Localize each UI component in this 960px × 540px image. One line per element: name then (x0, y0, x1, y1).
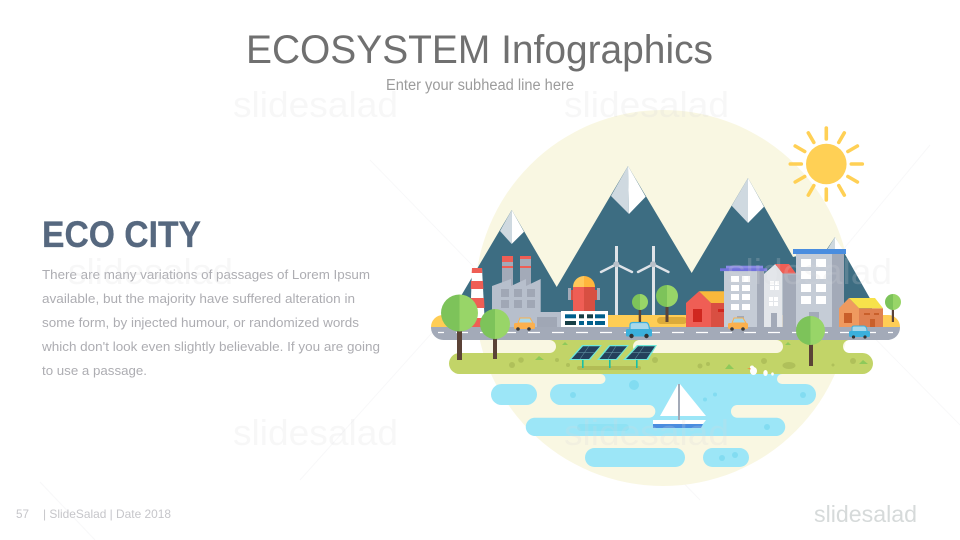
wind turbines (601, 246, 668, 316)
sailboat (653, 384, 706, 428)
ducks (747, 366, 774, 376)
solar panels (569, 345, 657, 370)
watermarks (68, 84, 892, 453)
icon: sun (790, 128, 862, 200)
footer: logo: slidesalad (814, 501, 917, 527)
footer: credit: | SlideSalad | Date 2018 (43, 507, 171, 521)
watermarks: slidesalad (68, 251, 233, 292)
body text block: which don't look even slightly believable. If you are going (41, 339, 380, 354)
water ripples (570, 380, 806, 461)
red house (686, 291, 724, 327)
ground and road (431, 315, 900, 340)
orange house (839, 298, 883, 327)
green field (449, 340, 873, 374)
lighthouse (470, 268, 485, 327)
body text block: some form, by injected humour, or randomized words (42, 315, 360, 330)
field details (509, 357, 856, 369)
car: blue centre (626, 322, 652, 338)
water (491, 374, 816, 467)
car: blue right (849, 326, 870, 339)
car: orange right (728, 318, 748, 331)
watermarks: slidesalad (233, 84, 398, 125)
body text block: to use a passage. (42, 363, 147, 378)
tree: right foreground (796, 316, 825, 366)
tree: large left (441, 294, 478, 360)
footer: page number: 57 (16, 507, 29, 521)
watermarks: slidesalad (727, 251, 892, 292)
factory (492, 256, 562, 327)
grey office building (720, 266, 767, 327)
cream background circle (475, 110, 851, 486)
tree: far right (885, 294, 901, 322)
watermarks: slidesalad (564, 412, 729, 453)
grass tufts (535, 342, 868, 369)
watermarks: slidesalad (564, 84, 729, 125)
title: ECOSYSTEM Infographics (246, 28, 713, 72)
tree: medium centre (656, 285, 678, 322)
heading: eco city: ECO CITY (42, 213, 201, 255)
illustration: eco city scene (431, 110, 901, 486)
gabled tall house (764, 264, 796, 327)
tree: small centre (632, 294, 648, 322)
body text block: available, but the majority have suffered alteration in (42, 291, 355, 306)
body text block (41, 267, 380, 378)
blue-roof tower block (793, 249, 846, 327)
watermarks: slidesalad (233, 412, 398, 453)
mountains (448, 166, 872, 318)
tree: second left (480, 309, 510, 359)
car: orange left (514, 318, 535, 331)
body text block: There are many variations of passages of Lorem Ipsum (42, 267, 370, 282)
subhead: Enter your subhead line here (386, 77, 574, 94)
red tower and white building (561, 276, 608, 327)
